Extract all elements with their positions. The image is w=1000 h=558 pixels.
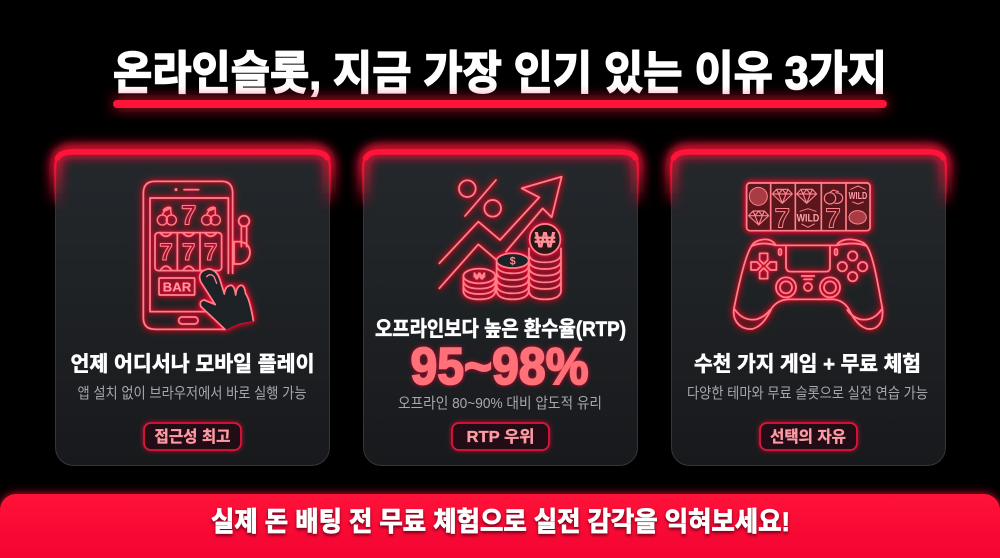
panel: mobile play	[55, 150, 330, 466]
icon: slot reels above game controller	[734, 183, 883, 329]
badge: 접근성 최고: 접근성 최고	[154, 428, 231, 446]
card 2 background	[363, 150, 638, 466]
icon: slot machine phone with tapping hand: 7	[159, 239, 173, 266]
slot strip: 7	[775, 203, 790, 234]
reels	[155, 233, 222, 271]
icon: percent, rising arrow and coin stacks: ₩	[473, 272, 486, 283]
card 3 background	[671, 150, 946, 466]
badge: 선택의 자유: 선택의 자유	[770, 428, 846, 446]
big number: 95~98%: 95~98%	[410, 338, 588, 396]
BAR	[159, 278, 195, 295]
card 1 background	[55, 150, 330, 466]
coin stack 1	[463, 269, 495, 299]
hand	[200, 269, 253, 330]
badge: 접근성 최고	[144, 423, 241, 450]
icon: slot machine phone with tapping hand: 7	[181, 200, 196, 231]
heading: 수천 가지 게임 + 무료 체험	[694, 353, 921, 376]
icon: percent, rising arrow and coin stacks: $	[510, 256, 516, 268]
coin stack 2	[497, 253, 529, 299]
icon: percent, rising arrow and coin stacks: ₩	[535, 227, 556, 252]
icon: slot machine phone with tapping hand: 7	[204, 239, 217, 266]
slot strip	[747, 183, 870, 234]
title: 온라인슬롯, 지금 가장 인기 있는 이유 3가지	[113, 47, 887, 99]
heading: 오프라인보다 높은 환수율(RTP)	[375, 318, 626, 341]
heading: 언제 어디서나 모바일 플레이	[70, 353, 314, 376]
badge: RTP 우위	[452, 423, 549, 450]
icon: percent, rising arrow and coin stacks	[439, 177, 562, 299]
title underline	[113, 99, 887, 108]
badge: RTP 우위: RTP 우위	[466, 428, 534, 446]
description: 다양한 테마와 무료 슬롯으로 실전 연습 가능	[687, 385, 928, 402]
lever	[239, 216, 249, 226]
panel: higher RTP	[363, 150, 638, 466]
coin stack 3	[529, 224, 561, 299]
icon: slot machine phone with tapping hand: 7	[182, 239, 195, 266]
bottom banner	[0, 494, 1000, 558]
cherries	[157, 207, 220, 225]
panel: game variety	[671, 150, 946, 466]
controller	[734, 239, 883, 329]
slot strip: WILD	[849, 191, 867, 202]
banner text: 실제 돈 배팅 전 무료 체험으로 실전 감각을 익혀보세요!	[211, 507, 790, 537]
icon: slot machine phone with tapping hand: BAR	[163, 279, 192, 294]
icon: slot machine phone with tapping hand	[143, 181, 253, 330]
slot strip: 7	[825, 203, 841, 234]
badge: 선택의 자유	[760, 423, 857, 450]
description: 앱 설치 없이 브라우저에서 바로 실행 가능	[78, 385, 307, 402]
description: 오프라인 80~90% 대비 압도적 유리	[398, 395, 602, 412]
slot strip: WILD	[797, 213, 820, 225]
